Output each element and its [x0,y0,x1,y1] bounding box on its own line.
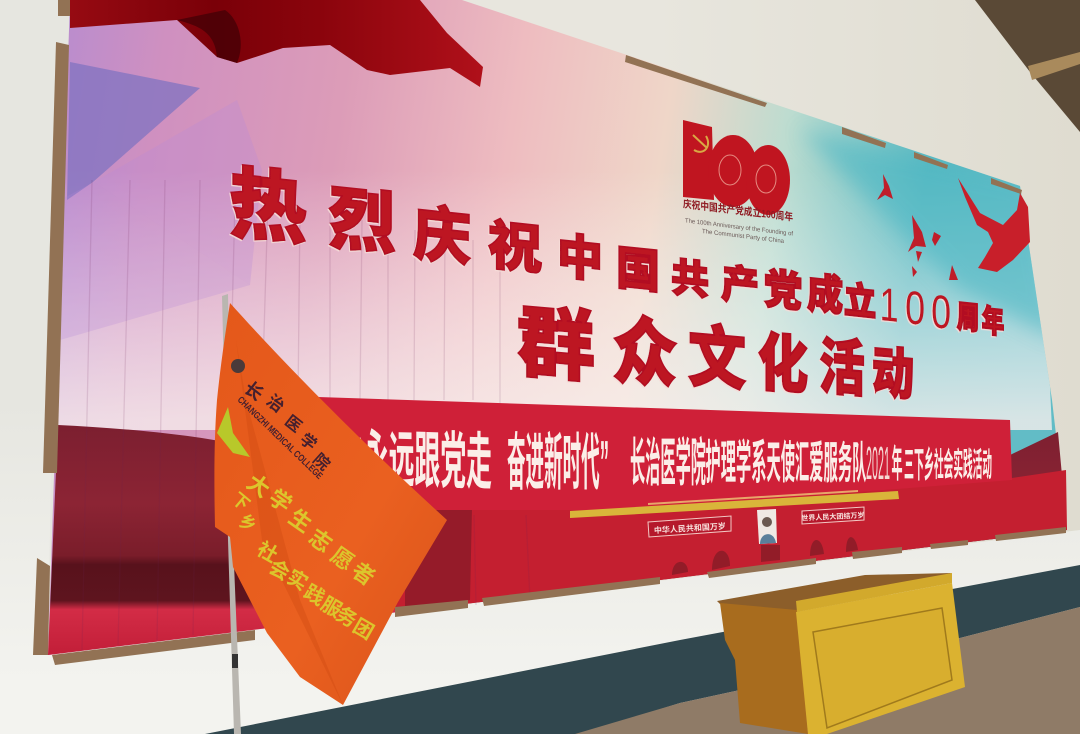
service team text: 服 [317,593,345,622]
countryside text [228,489,259,535]
volunteer text: 学 [264,484,296,517]
100th anniversary logo [683,120,793,245]
red slogan banner [318,397,1012,510]
logo caption: The Communist Party of China [702,228,785,245]
logo caption [683,197,793,245]
subtitle: 动 [872,342,914,407]
lower red field [48,425,1067,655]
volunteer text [242,469,379,590]
main title: 周 [957,299,979,336]
red ribbon top right [958,178,1030,272]
slogan text: 服务队 [824,439,866,488]
main title: 成 [807,270,843,320]
main title: 烈 [328,181,396,264]
volunteer text: 志 [304,524,336,557]
service team text: 会 [265,555,294,585]
service team text: 务 [332,602,361,632]
volunteer text: 者 [347,557,379,590]
slogan text [350,425,992,498]
main title: 产 [721,262,759,310]
slogan text: 护理学系 [706,436,766,489]
service team text: 社 [253,537,282,567]
logo caption: 庆祝中国共产党成立100周年 [683,197,793,224]
box panel [813,608,952,728]
main title: 热 [229,159,307,255]
box lid front [796,573,952,612]
lower bright wall [0,400,1080,734]
service team text: 团 [349,615,377,644]
slogan text: 奋进新时代” [507,429,609,498]
college name [235,378,334,482]
main title: 庆 [413,199,471,273]
top red flag [70,0,483,87]
service team text: 践 [300,580,329,610]
main title: 党 [764,266,802,316]
yellow wooden box [717,573,965,734]
service team text [253,537,377,644]
flag emblem [217,359,250,457]
subtitle [517,298,914,407]
slogan text: “永远跟党走 [350,425,492,498]
subtitle: 活 [819,334,865,405]
orange flag [214,303,447,705]
college name: 学 [296,429,321,454]
logo caption: The 100th Anniversary of the Founding of [685,217,793,238]
hammer and sickle [693,135,708,152]
number 100 [683,120,790,215]
upper fade to white [55,170,1052,430]
slogan text: 天使汇爱 [766,437,824,488]
college name: 医 [281,413,304,436]
small shadows on banner [672,537,858,575]
countryside text: 下 [228,489,253,515]
main title: 立 [844,279,876,324]
subtitle: 众 [612,309,678,398]
main title [229,159,1004,340]
slogan text: 长治医学院 [630,435,706,493]
college name: 治 [263,391,288,416]
red doves [877,174,958,280]
college name: 长 [240,378,267,405]
slogan plaque right [801,507,865,524]
slogan plaque left: 中华人民共和国万岁 [654,521,726,535]
main title: 共 [671,256,709,304]
dark wall skirting [205,565,1080,734]
ground [575,607,1080,734]
main title: 中 [557,230,603,289]
flag pole [222,294,241,734]
box top [717,573,952,612]
gold stripes [570,490,899,518]
geometric triangles [60,62,262,340]
volunteer text: 愿 [326,542,358,575]
main title: 0 [905,280,925,335]
subtitle: 群 [517,298,595,392]
right lower red [330,470,1067,612]
countryside text: 乡 [237,510,259,535]
teal corner glow [800,130,1060,340]
subtitle: 化 [758,329,808,403]
slogan plaque right: 世界人民大团结万岁 [801,510,865,523]
main title: 国 [616,242,660,299]
roof eaves [975,0,1080,132]
year rings [719,155,776,193]
slogan text: 年 [892,444,902,486]
box side [720,603,808,734]
box front [796,583,965,734]
volunteer text: 生 [284,504,316,537]
flag folds [236,340,343,705]
main title: 年 [982,303,1004,340]
main title: 祝 [488,215,542,281]
college name: 院 [309,449,334,474]
volunteer text: 大 [242,469,274,502]
lower dark folds behind flag [405,508,472,608]
fabric folds [82,180,530,650]
portrait of Mao [757,509,777,544]
main title: 1 [880,278,898,332]
slogan text: 2021 [866,437,890,489]
slogan plaque left [648,516,731,537]
subtitle: 文 [688,319,746,400]
service team text: 实 [283,565,312,595]
slogan text: 三下乡 [904,444,934,485]
main title: 0 [931,284,951,339]
college name: CHANGZHI MEDICAL COLLEGE [235,395,325,482]
